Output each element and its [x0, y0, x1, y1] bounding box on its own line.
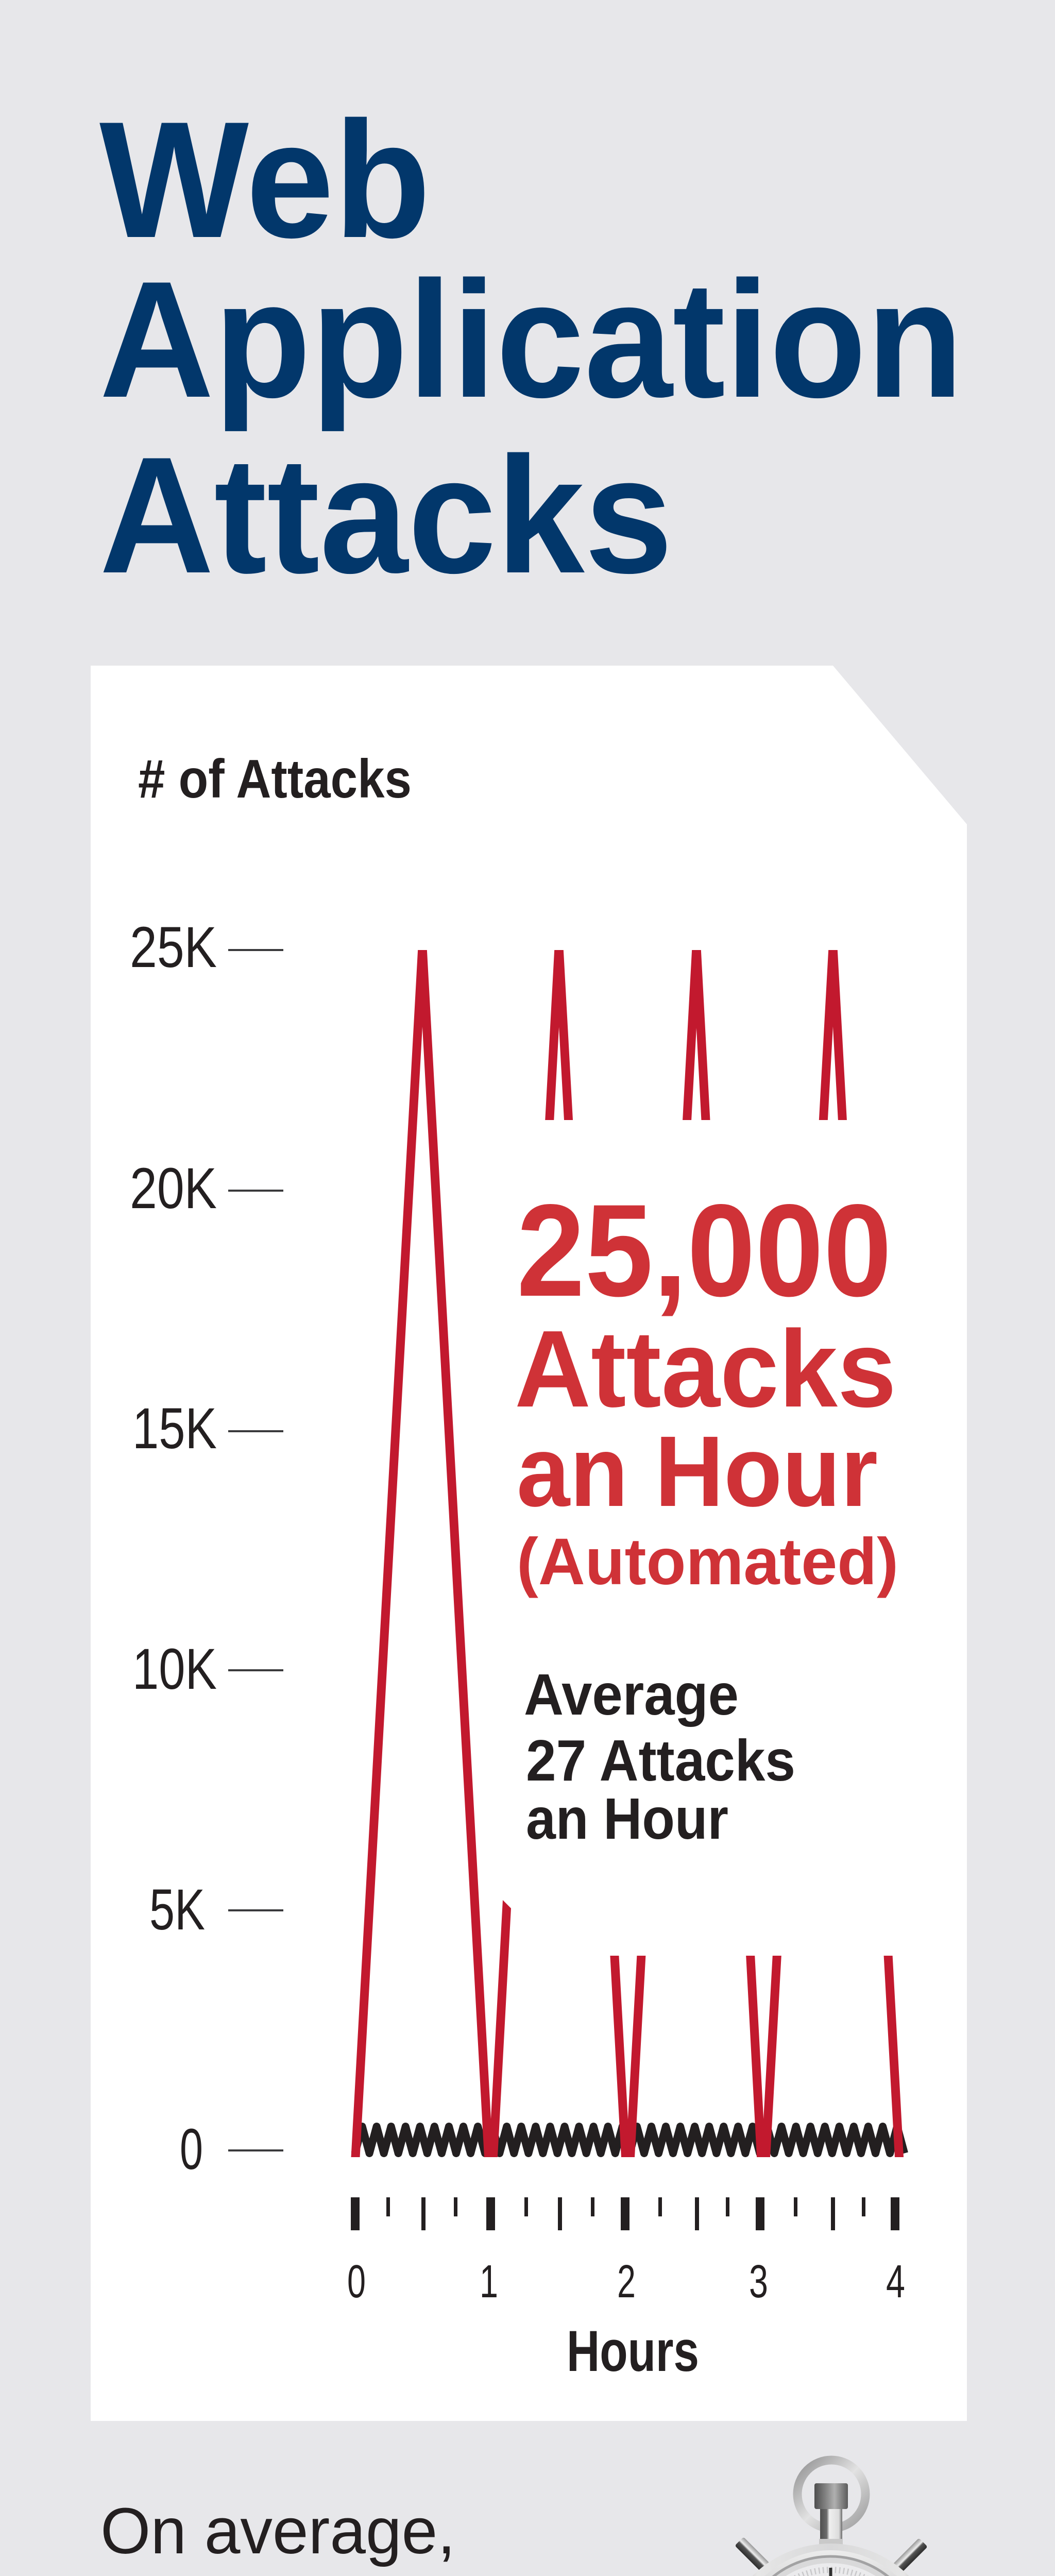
callout: average 27 attacks an hour: 27 Attacks — [526, 1728, 795, 1793]
y-axis labels and ticks: 15K — [132, 1396, 217, 1461]
callout: average 27 attacks an hour — [524, 1662, 795, 1851]
callout: 25,000 attacks an hour: an Hour — [517, 1415, 878, 1528]
y-axis title: # of Attacks — [138, 749, 412, 809]
title: Web — [99, 88, 431, 273]
x-axis labels: 0 — [347, 2256, 366, 2308]
y-axis labels and ticks: 10K — [132, 1637, 217, 1701]
callout: 25,000 attacks an hour: (Automated) — [517, 1525, 898, 1599]
title: Attacks — [99, 423, 673, 608]
chart: average attacks black wave — [355, 2127, 905, 2154]
x-axis ticks — [351, 2197, 899, 2230]
x-axis labels: 1 — [480, 2256, 498, 2308]
callout: 25,000 attacks an hour — [515, 1177, 898, 1599]
text block: average attacks — [100, 2495, 694, 2576]
x-axis labels: 3 — [749, 2256, 768, 2308]
y-axis labels and ticks: 20K — [130, 1156, 217, 1221]
y-axis labels and ticks: 5K — [149, 1877, 205, 1942]
chart: automated attacks red spikes — [353, 947, 901, 2199]
x-axis labels — [347, 2256, 905, 2308]
x-axis labels: 4 — [886, 2256, 905, 2308]
icon: stopwatch — [722, 2460, 939, 2576]
title: Application — [99, 247, 963, 433]
x-axis labels: 2 — [617, 2256, 636, 2308]
panel: chart card with clipped corner — [91, 666, 967, 2421]
callout: 25,000 attacks an hour: 25,000 — [517, 1177, 892, 1324]
y-axis labels and ticks: 25K — [130, 915, 217, 979]
text block: average attacks: On average, — [100, 2495, 455, 2567]
x-axis title: Hours — [567, 2319, 699, 2383]
y-axis labels and ticks — [130, 915, 283, 2181]
y-axis labels and ticks: 0 — [180, 2117, 203, 2181]
title — [99, 88, 963, 608]
callout: average 27 attacks an hour: an Hour — [526, 1786, 728, 1851]
callout: average 27 attacks an hour: Average — [524, 1662, 739, 1727]
callout: 25,000 attacks an hour: Attacks — [515, 1308, 896, 1430]
